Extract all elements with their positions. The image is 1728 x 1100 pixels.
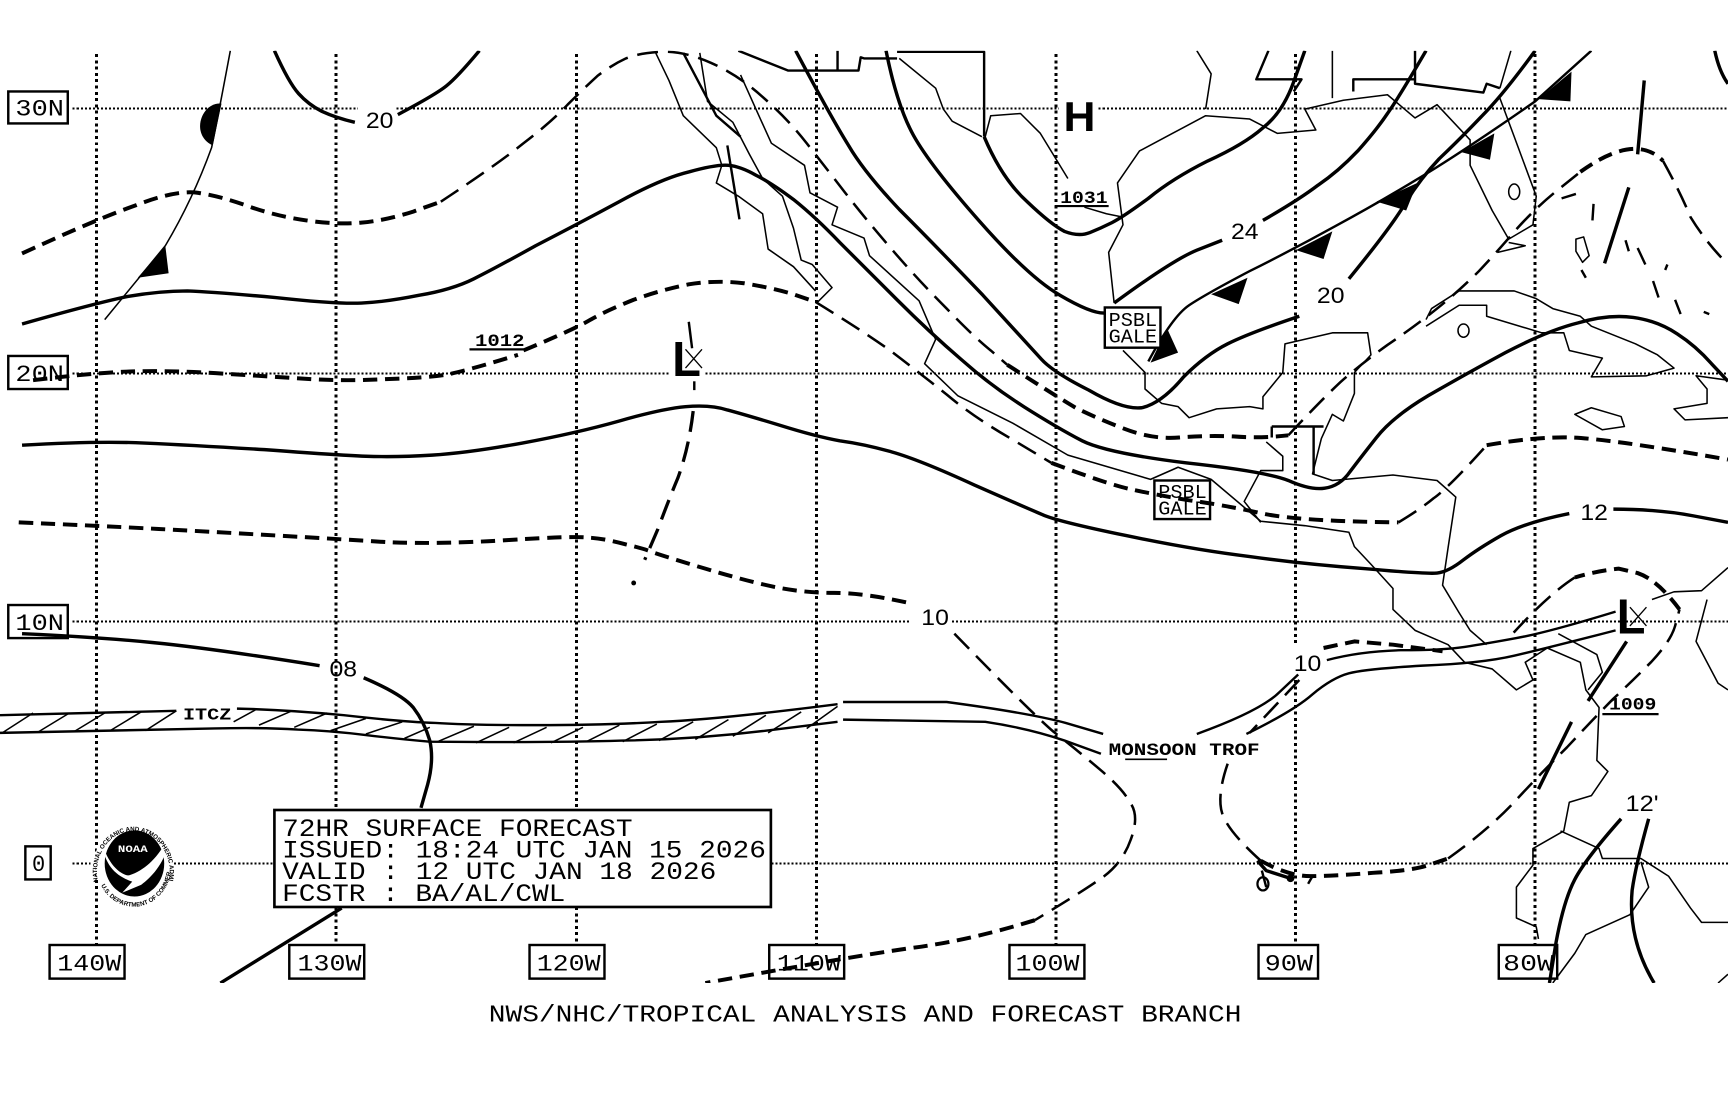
low pressure centre west: L: [672, 331, 701, 387]
solid isobar 20: [796, 51, 1535, 408]
solid isobar high centre: [984, 51, 1305, 234]
gale warning north: GALE: [1109, 326, 1157, 349]
bahamas troughs: [1605, 51, 1728, 263]
isobar value labels: 08: [330, 657, 357, 682]
forecast information box: VALID : 12 UTC JAN 18 2026: [282, 858, 716, 887]
dashed isobar 10 east loop: [1220, 569, 1680, 876]
dashed isobar 10 west: [19, 522, 1135, 983]
forecast information box: FCSTR : BA/AL/CWL: [282, 880, 565, 909]
coastlines and borders: [656, 51, 1728, 983]
galapagos islands: [1257, 861, 1313, 890]
cold front gulf of mexico: [1148, 51, 1591, 363]
trough near low: [631, 322, 694, 585]
isobar value labels: 20: [366, 108, 393, 133]
latitude labels: 30N: [15, 97, 64, 123]
source caption: NWS/NHC/TROPICAL ANALYSIS AND FORECAST BRANCH: [489, 1003, 1241, 1030]
dashed isobar 14: [33, 282, 1728, 522]
isobar value labels: 20: [1317, 283, 1344, 308]
isobar value labels: [330, 108, 1659, 816]
lat/lon dotted grid: [73, 54, 1728, 944]
gulf of california trough: [683, 53, 741, 219]
solid isobar north-west: [274, 51, 479, 122]
gale warning south: [1154, 480, 1210, 521]
isobar value labels: 10: [1294, 651, 1321, 676]
monsoon trough: [843, 612, 1616, 754]
isobar value labels: 12': [1626, 791, 1659, 816]
solid isobar 16: [22, 165, 1728, 489]
troughs near 1009 low: [1538, 641, 1627, 789]
pressure value labels: 1031: [1060, 189, 1108, 209]
longitude labels: 80W: [1503, 951, 1554, 977]
latitude labels: 10N: [15, 611, 64, 637]
ITCZ band: [0, 704, 838, 743]
cold front pacific with warm symbol: [105, 51, 230, 320]
latitude labels: 20N: [15, 362, 64, 388]
gale warning south: GALE: [1158, 498, 1207, 521]
forecast information box: 72HR SURFACE FORECAST: [282, 815, 633, 844]
high pressure centre: H: [1063, 93, 1095, 140]
isobars 12 south: [1549, 819, 1654, 983]
solid isobar 08: [22, 634, 432, 983]
pressure value labels: [469, 189, 1659, 716]
gale warning north: [1105, 307, 1160, 349]
solid isobar 24: [886, 51, 1426, 313]
pressure value labels: 1012: [475, 332, 525, 352]
longitude labels: 110W: [777, 951, 841, 977]
solid isobar 12: [22, 406, 1728, 573]
isobar value labels: 12: [1580, 500, 1608, 525]
isobar value labels: 10: [921, 605, 949, 630]
longitude labels: 120W: [537, 951, 601, 977]
forecast information box: ISSUED: 18:24 UTC JAN 15 2026: [282, 837, 766, 866]
gale warning north: PSBL: [1109, 309, 1157, 332]
longitude labels: 100W: [1016, 951, 1080, 977]
pressure value labels: 1009: [1609, 696, 1656, 716]
forecast information box: [274, 810, 771, 909]
low pressure centre east: L: [1617, 589, 1645, 645]
isobar value labels: 24: [1231, 219, 1259, 244]
longitude labels: [50, 945, 1557, 979]
NOAA logo: NOAA: [118, 844, 148, 855]
NOAA logo: [92, 826, 174, 907]
ITCZ label: ITCZ: [183, 706, 232, 725]
NOAA logo: U.S. DEPARTMENT OF COMMERCE: [102, 872, 171, 907]
longitude labels: 90W: [1265, 951, 1313, 977]
NOAA logo: NATIONAL OCEANIC AND ATMOSPHERIC ADMINISTRATION: [92, 826, 174, 882]
longitude labels: 130W: [298, 951, 362, 977]
longitude labels: 140W: [57, 951, 121, 977]
latitude labels: [8, 91, 68, 879]
monsoon trough label: MONSOON TROF: [1109, 742, 1260, 761]
latitude labels: 0: [32, 852, 45, 878]
dashed isobar 18: [22, 52, 1728, 438]
gale warning south: PSBL: [1158, 481, 1207, 504]
